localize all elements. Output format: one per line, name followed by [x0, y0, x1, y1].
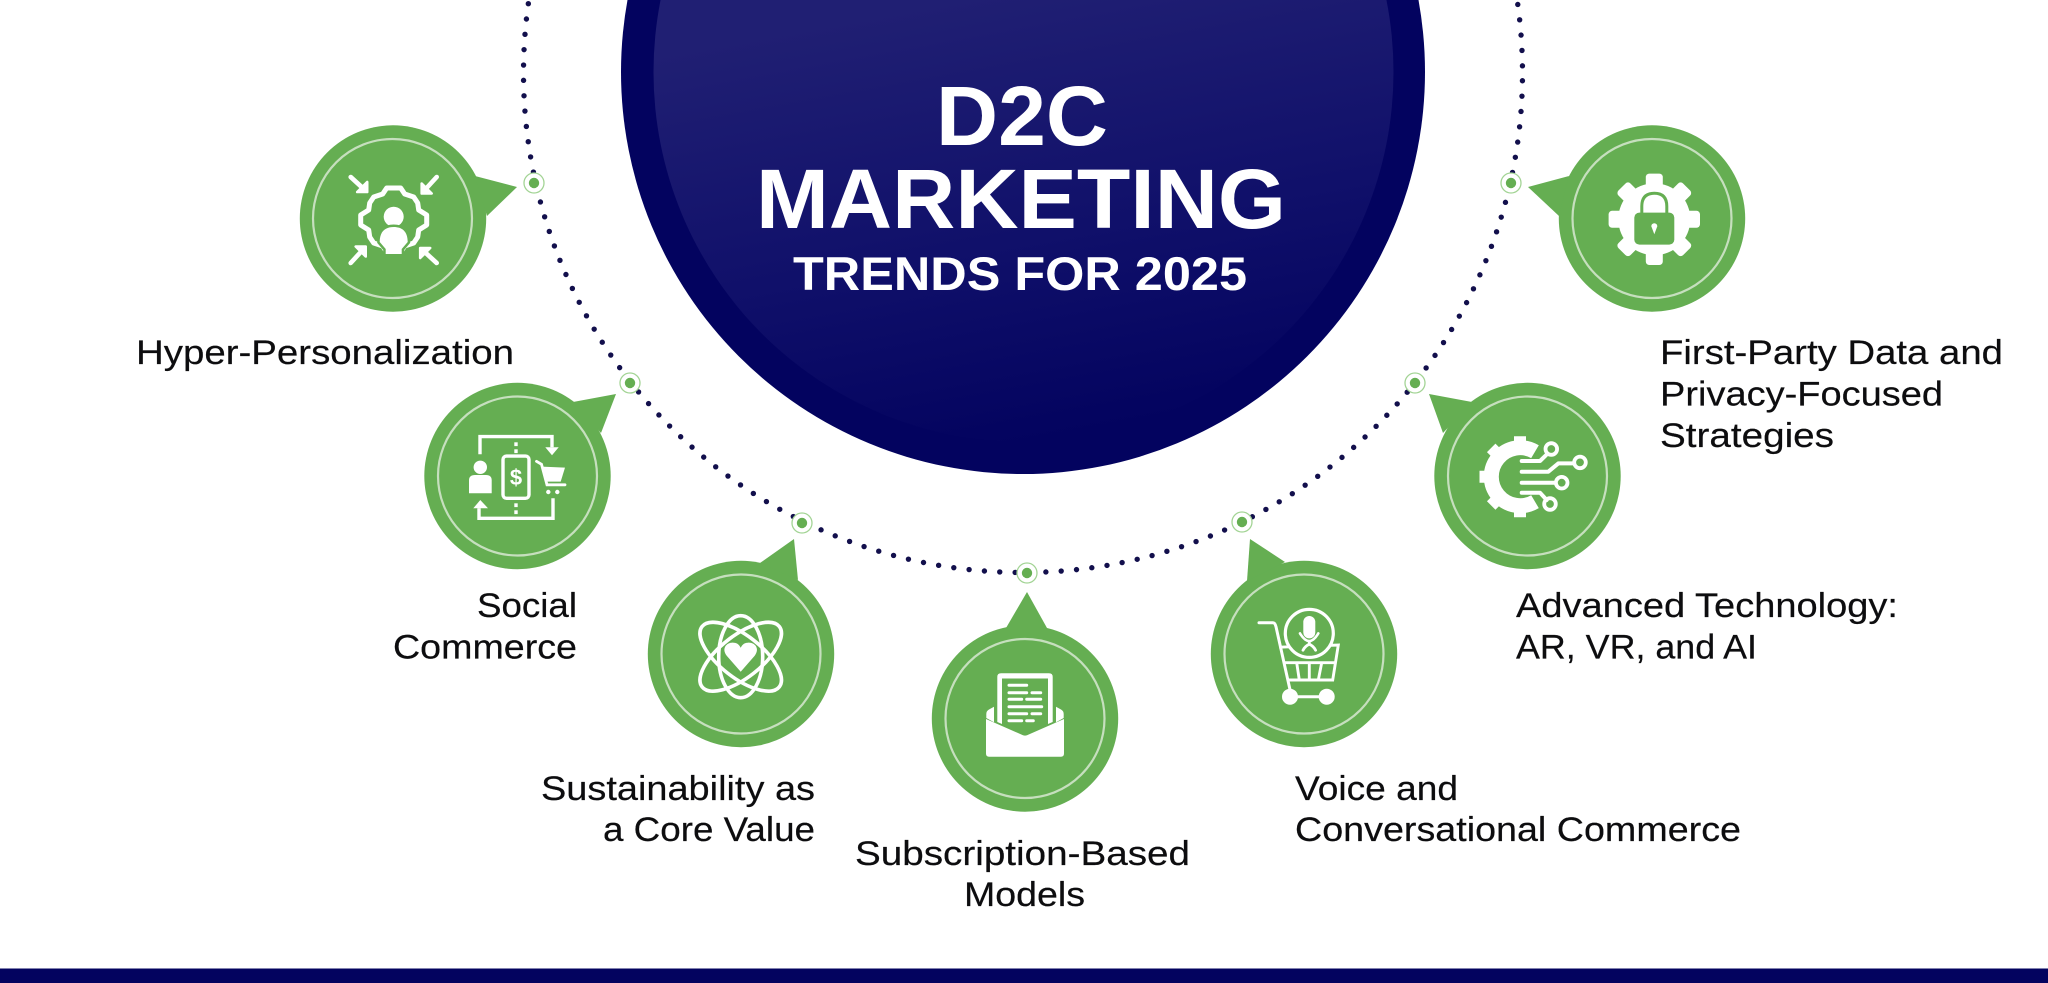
- label: Hyper-Personalization: [136, 334, 514, 372]
- icon: atom with heart: [689, 610, 792, 703]
- node: Subscription-Based Models: [855, 563, 1190, 914]
- icon: customer, phone payment and cart: $: [510, 465, 522, 490]
- green badge with pointer: [932, 592, 1118, 812]
- label: Social: [477, 587, 577, 625]
- central title circle: [621, 0, 1425, 474]
- connector hub: [1501, 173, 1521, 193]
- connector hub: [1405, 373, 1425, 393]
- green badge with pointer: [424, 383, 616, 569]
- title: [756, 69, 1286, 300]
- green badge with pointer: [648, 539, 834, 747]
- icon: customer, phone payment and cart: [469, 437, 565, 518]
- icon: envelope with letter: [986, 673, 1064, 757]
- label: Strategies: [1660, 417, 1834, 455]
- node: Voice and Conversational Commerce: [1211, 512, 1741, 849]
- title: TRENDS FOR 2025: [793, 247, 1247, 300]
- green badge with pointer: [300, 125, 517, 312]
- footer bar: [0, 968, 2048, 983]
- label: [541, 770, 815, 849]
- node: Sustainability as a Core Value: [541, 513, 834, 849]
- label: Privacy-Focused: [1660, 376, 1943, 414]
- label: Conversational Commerce: [1295, 811, 1741, 849]
- label: Subscription-Based: [855, 835, 1190, 873]
- connector hub: [1232, 512, 1252, 532]
- label: Advanced Technology:: [1516, 587, 1898, 625]
- dotted arc: [524, 0, 1522, 572]
- node: First-Party Data and Privacy-Focused Strategies: [1501, 125, 2003, 455]
- icon: shopping cart with microphone: [1259, 609, 1338, 705]
- connector hub: [792, 513, 812, 533]
- node: Hyper-Personalization: [136, 125, 544, 372]
- connector hub: [524, 173, 544, 193]
- label: a Core Value: [603, 811, 815, 849]
- label: Models: [964, 876, 1085, 914]
- node: Advanced Technology: [1405, 373, 1898, 666]
- title: MARKETING: [756, 152, 1286, 246]
- node: Social Commerce: [393, 373, 640, 666]
- label: [1660, 334, 2003, 455]
- label: AR, VR, and AI: [1516, 628, 1757, 666]
- label: [1295, 770, 1741, 849]
- label: [1516, 587, 1898, 666]
- label: Voice and: [1295, 770, 1458, 808]
- connector hub: [620, 373, 640, 393]
- label: Sustainability as: [541, 770, 815, 808]
- label: [855, 835, 1190, 914]
- label: Commerce: [393, 628, 577, 666]
- label: [393, 587, 577, 666]
- green badge with pointer: [1528, 125, 1745, 312]
- label: First-Party Data and: [1660, 334, 2003, 372]
- icon: half gear with circuit lines: [1480, 436, 1586, 517]
- green badge with pointer: [1211, 539, 1397, 747]
- title: D2C: [936, 69, 1108, 163]
- icon: gear with padlock: [1609, 174, 1700, 265]
- icon: person in gear with arrows: [351, 177, 437, 263]
- green badge with pointer: [1429, 383, 1621, 569]
- connector hub: [1017, 563, 1037, 583]
